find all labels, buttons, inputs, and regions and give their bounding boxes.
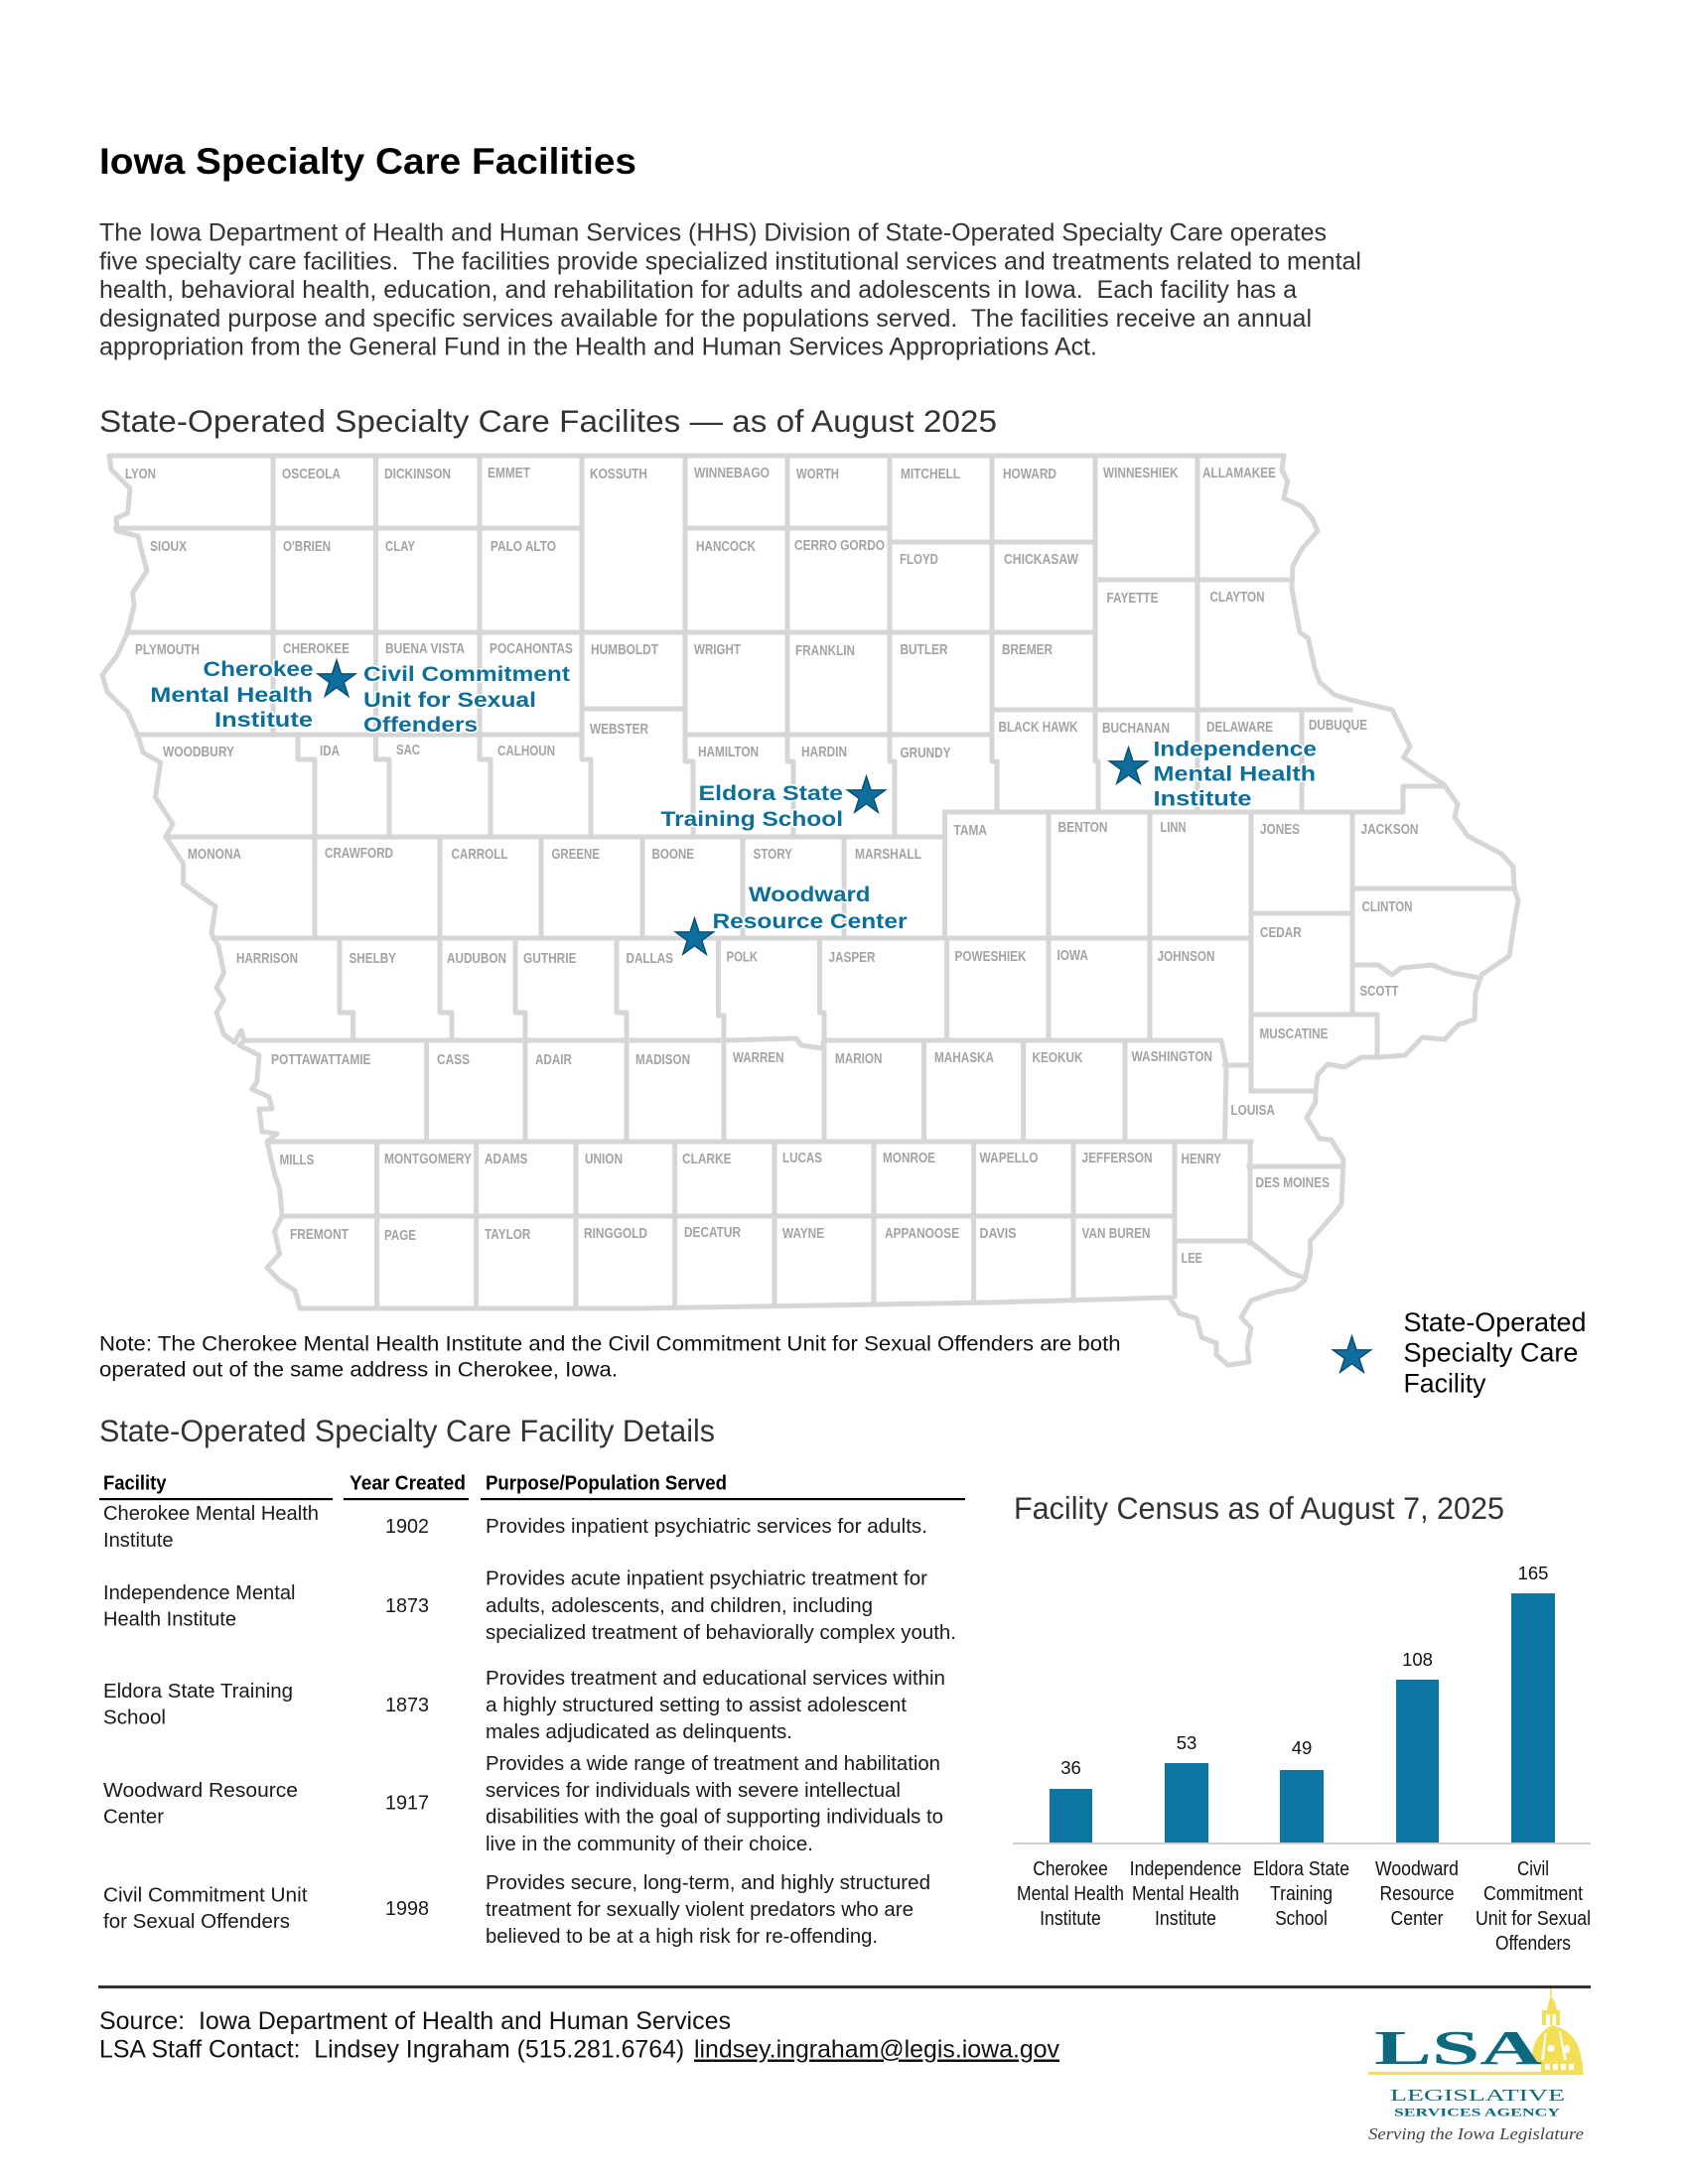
county labels: CLAY	[385, 539, 415, 555]
row: Civil Commitment: treatment for sexually violent predators who are	[486, 1898, 914, 1921]
facility label: Civil Commitment Unit for Sexual Offenders: Unit for Sexual	[363, 688, 536, 712]
note text: Note: The Cherokee Mental Health Institute and the Civil Commitment Unit for Sexual Offenders are both	[99, 1333, 1121, 1356]
county labels: DALLAS	[626, 951, 673, 967]
county labels: SCOTT	[1360, 984, 1399, 1000]
category labels	[1017, 1857, 1591, 1955]
county labels: BOONE	[651, 847, 694, 863]
county labels: CASS	[437, 1052, 470, 1068]
category labels: Eldora State	[1253, 1857, 1349, 1880]
facility label: Civil Commitment Unit for Sexual Offenders: Civil Commitment	[363, 662, 570, 686]
county labels: ADAMS	[485, 1152, 528, 1167]
facility label: Civil Commitment Unit for Sexual Offenders	[363, 662, 570, 737]
county labels: WARREN	[733, 1050, 784, 1066]
county labels: CRAWFORD	[325, 846, 393, 862]
county labels: ADAIR	[535, 1052, 572, 1068]
row: Civil Commitment: believed to be at a high risk for re-offending.	[486, 1925, 878, 1948]
county labels: GREENE	[552, 847, 600, 863]
table header: Year Created	[350, 1472, 466, 1495]
category labels: Civil	[1517, 1857, 1549, 1880]
row: Woodward	[103, 1752, 943, 1855]
county labels: JONES	[1260, 822, 1300, 838]
county labels: DELAWARE	[1206, 720, 1273, 736]
facility marker: Cherokee Mental Health Institute	[150, 657, 355, 732]
county labels: JOHNSON	[1158, 949, 1215, 965]
value labels: 49	[1292, 1737, 1312, 1758]
row: Eldora: 1873	[385, 1694, 429, 1716]
map legend: Facility	[1404, 1369, 1486, 1399]
category labels: Offenders	[1495, 1932, 1571, 1955]
facility marker: Independence Mental Health Institute: Institute	[1154, 786, 1252, 810]
county labels: AUDUBON	[447, 951, 506, 967]
county labels: GRUNDY	[900, 746, 951, 761]
value labels: 165	[1518, 1563, 1548, 1583]
LSA logo: SERVICES AGENCY	[1394, 2108, 1561, 2119]
facility marker: Eldora State Training School	[661, 776, 886, 831]
row: Woodward: services for individuals with severe intellectual	[486, 1779, 901, 1802]
county labels: HAMILTON	[698, 745, 759, 760]
table header: Purpose/Population Served	[486, 1472, 727, 1495]
county labels: BUCHANAN	[1102, 721, 1170, 737]
category labels: Mental Health	[1132, 1882, 1239, 1905]
county labels: LEE	[1182, 1251, 1202, 1267]
row: Cherokee: 1902	[385, 1515, 429, 1538]
county labels: WEBSTER	[590, 722, 648, 738]
LSA logo: Serving the Iowa Legislature	[1368, 2124, 1585, 2143]
row: Civil Commitment: 1998	[385, 1897, 429, 1920]
county labels: BUTLER	[900, 642, 948, 658]
county labels: WASHINGTON	[1132, 1049, 1212, 1065]
category labels: Commitment	[1483, 1882, 1583, 1905]
row: Woodward: Provides a wide range of treatment and habilitation	[486, 1752, 940, 1775]
county labels: TAYLOR	[485, 1227, 531, 1243]
county labels: JEFFERSON	[1082, 1151, 1152, 1166]
county labels: DECATUR	[684, 1225, 741, 1241]
category labels: Mental Health	[1017, 1882, 1124, 1905]
category labels: Training	[1270, 1882, 1333, 1905]
county labels: MADISON	[635, 1052, 690, 1068]
facility marker: Cherokee Mental Health Institute: Institute	[214, 708, 313, 732]
county labels: GUTHRIE	[523, 951, 577, 967]
county labels: FLOYD	[900, 552, 938, 568]
row: Civil Commitment: Civil Commitment Unit	[103, 1884, 308, 1907]
county labels: BLACK HAWK	[999, 720, 1078, 736]
row: Civil Commitment	[103, 1871, 930, 1948]
facility marker: Independence Mental Health Institute: Independence	[1154, 737, 1317, 760]
facility marker: Cherokee Mental Health Institute: Mental Health	[150, 683, 313, 707]
county labels: DAVIS	[979, 1226, 1017, 1242]
category labels: Independence	[1130, 1857, 1241, 1880]
county labels: FAYETTE	[1106, 591, 1159, 607]
county labels: LOUISA	[1231, 1103, 1275, 1119]
county labels: MONTGOMERY	[384, 1152, 472, 1167]
row: Cherokee: Provides inpatient psychiatric services for adults.	[486, 1515, 927, 1538]
county labels: HANCOCK	[696, 539, 756, 555]
row: Eldora: males adjudicated as delinquents.	[486, 1720, 792, 1743]
table heading: State-Operated Specialty Care Facility Details	[99, 1413, 715, 1448]
value labels: 36	[1060, 1757, 1081, 1778]
category labels: Center	[1390, 1907, 1444, 1930]
county labels: CHICKASAW	[1004, 552, 1078, 568]
county labels: APPANOOSE	[885, 1226, 959, 1242]
row: Independence: 1873	[385, 1594, 429, 1617]
county labels: PAGE	[384, 1228, 416, 1244]
category labels: Woodward	[1375, 1857, 1459, 1880]
county labels: DICKINSON	[384, 467, 451, 482]
facility marker: Independence Mental Health Institute	[1109, 737, 1317, 810]
row: Cherokee: Institute	[103, 1529, 174, 1552]
intro paragraph: five specialty care facilities. The facilities provide specialized institutional services and treatments related to mental	[99, 248, 1361, 276]
county labels: MARION	[835, 1051, 882, 1067]
source and contact: lindsey.ingraham@legis.iowa.gov	[694, 2035, 1059, 2063]
source and contact: LSA Staff Contact: Lindsey Ingraham (515.281.6764)	[99, 2035, 691, 2063]
row: Independence	[103, 1568, 956, 1644]
county labels: RINGGOLD	[584, 1226, 647, 1242]
county labels: WORTH	[796, 467, 839, 482]
county labels: ALLAMAKEE	[1202, 466, 1276, 481]
county labels: PALO ALTO	[491, 539, 556, 555]
LSA logo: LSA	[1374, 2020, 1543, 2075]
chart title: Facility Census as of August 7, 2025	[1014, 1490, 1504, 1526]
county labels: WRIGHT	[694, 642, 741, 658]
county labels: UNION	[585, 1152, 623, 1167]
county labels: PLYMOUTH	[135, 642, 200, 658]
row: Woodward: live in the community of their choice.	[486, 1833, 813, 1855]
county labels	[125, 466, 1418, 1267]
row: Independence: Provides acute inpatient psychiatric treatment for	[486, 1568, 927, 1590]
icon: capitol dome	[1531, 1988, 1583, 2072]
county labels: KEOKUK	[1033, 1050, 1083, 1066]
county labels: SIOUX	[150, 539, 187, 555]
census chart	[1013, 1490, 1591, 1955]
row: Independence: Health Institute	[103, 1608, 236, 1631]
county labels: LUCAS	[782, 1151, 822, 1166]
county labels: CALHOUN	[497, 744, 555, 759]
facility marker: Eldora State Training School: Training School	[661, 807, 843, 831]
facility marker: Woodward Resource Center: Woodward	[749, 883, 870, 906]
county labels: POCAHONTAS	[490, 641, 573, 657]
row: Woodward: 1917	[385, 1792, 429, 1815]
facility marker: Woodward Resource Center: Resource Center	[713, 909, 908, 933]
county labels: CERRO GORDO	[794, 538, 885, 554]
row: Independence: adults, adolescents, and children, including	[486, 1594, 873, 1617]
county labels: MUSCATINE	[1259, 1026, 1329, 1042]
county labels: CARROLL	[451, 847, 508, 863]
value labels: 53	[1177, 1732, 1196, 1753]
facility details table	[99, 1472, 965, 1948]
county labels: SHELBY	[350, 951, 396, 967]
facility marker: Independence Mental Health Institute: Mental Health	[1154, 762, 1316, 786]
county labels: JASPER	[828, 950, 876, 966]
category labels: School	[1275, 1907, 1328, 1930]
county labels: FRANKLIN	[795, 643, 855, 659]
county labels: WAYNE	[782, 1226, 824, 1242]
county labels: POLK	[727, 949, 759, 965]
map legend	[1333, 1307, 1587, 1399]
row: Woodward: Center	[103, 1806, 164, 1829]
county labels: STORY	[753, 847, 792, 863]
note text	[99, 1333, 1121, 1382]
county labels: MONROE	[883, 1151, 935, 1166]
row: Cherokee	[103, 1502, 927, 1552]
category labels: Resource	[1380, 1882, 1454, 1905]
county labels: WINNEBAGO	[694, 466, 770, 481]
county labels: HARRISON	[236, 951, 298, 967]
value labels: 108	[1402, 1649, 1433, 1670]
county labels: SAC	[396, 743, 420, 758]
county labels: TAMA	[953, 823, 987, 839]
county labels: POTTAWATTAMIE	[271, 1052, 371, 1068]
value labels	[1060, 1563, 1548, 1778]
county labels: MITCHELL	[901, 467, 960, 482]
county labels: LINN	[1160, 820, 1186, 836]
county labels: VAN BUREN	[1082, 1226, 1150, 1242]
county labels: CLAYTON	[1209, 590, 1265, 606]
county labels: HARDIN	[801, 745, 847, 760]
county labels: BENTON	[1058, 820, 1108, 836]
county labels: EMMET	[488, 466, 530, 481]
county labels: BREMER	[1002, 642, 1053, 658]
table header	[99, 1472, 965, 1500]
facility marker: Cherokee Mental Health Institute: Cherokee	[203, 657, 314, 681]
county labels: HOWARD	[1003, 467, 1056, 482]
county labels: CLARKE	[682, 1152, 732, 1167]
county labels: HUMBOLDT	[591, 642, 658, 658]
row: Independence: Independence Mental	[103, 1581, 296, 1604]
row: Eldora	[103, 1667, 945, 1743]
row: Woodward: Woodward Resource	[103, 1779, 298, 1802]
county labels: MONONA	[188, 847, 241, 863]
county labels: O'BRIEN	[283, 539, 331, 555]
county labels: MAHASKA	[934, 1050, 994, 1066]
county labels: WINNESHIEK	[1103, 466, 1179, 481]
county labels: MARSHALL	[855, 847, 921, 863]
county labels: POWESHIEK	[955, 949, 1027, 965]
county labels: CHEROKEE	[283, 641, 350, 657]
county labels: CEDAR	[1260, 925, 1302, 941]
county labels: DUBUQUE	[1309, 718, 1367, 734]
county labels: MILLS	[280, 1153, 315, 1168]
intro paragraph: designated purpose and specific services available for the populations served. The facilities receive an annual	[99, 305, 1312, 333]
LSA logo: LEGISLATIVE	[1390, 2086, 1565, 2105]
table header: Facility	[103, 1472, 167, 1495]
LSA logo	[1368, 1988, 1585, 2143]
row: Independence: specialized treatment of behaviorally complex youth.	[486, 1621, 956, 1644]
source and contact	[99, 2007, 1059, 2063]
map heading: State-Operated Specialty Care Facilites — as of August 2025	[99, 403, 997, 439]
intro paragraph: health, behavioral health, education, and rehabilitation for adults and adolescents in Iowa. Each facility has a	[99, 276, 1297, 304]
county labels: OSCEOLA	[282, 467, 341, 482]
facility marker: Woodward Resource Center	[675, 883, 908, 954]
row: Civil Commitment: Provides secure, long-term, and highly structured	[486, 1871, 930, 1894]
category labels: Institute	[1155, 1907, 1216, 1930]
county labels: HENRY	[1182, 1152, 1221, 1167]
intro paragraph: The Iowa Department of Health and Human Services (HHS) Division of State-Operated Specialty Care operates	[99, 219, 1327, 247]
county labels: LYON	[125, 467, 156, 482]
county labels: CLINTON	[1362, 899, 1412, 915]
category labels: Unit for Sexual	[1476, 1907, 1591, 1930]
category labels: Institute	[1040, 1907, 1101, 1930]
note text: operated out of the same address in Cherokee, Iowa.	[99, 1359, 618, 1382]
county boundary lines	[116, 456, 1514, 1307]
row: Cherokee: Cherokee Mental Health	[103, 1502, 319, 1525]
county labels: DES MOINES	[1255, 1175, 1330, 1191]
row: Eldora: a highly structured setting to assist adolescent	[486, 1694, 907, 1716]
category labels: Cherokee	[1033, 1857, 1108, 1880]
row: Woodward: disabilities with the goal of supporting individuals to	[486, 1806, 943, 1829]
row: Civil Commitment: for Sexual Offenders	[103, 1910, 290, 1933]
county labels: IDA	[320, 744, 340, 759]
intro paragraph: appropriation from the General Fund in the Health and Human Services Appropriations Act.	[99, 334, 1097, 361]
county labels: KOSSUTH	[590, 467, 647, 482]
row: Eldora: School	[103, 1706, 166, 1729]
county labels: FREMONT	[290, 1227, 349, 1243]
map legend: State-Operated	[1404, 1307, 1587, 1337]
facility label: Civil Commitment Unit for Sexual Offenders: Offenders	[363, 713, 478, 737]
county labels: WOODBURY	[163, 745, 234, 760]
bars	[1050, 1593, 1555, 1843]
map of Iowa counties	[102, 456, 1518, 1365]
county labels: BUENA VISTA	[385, 641, 465, 657]
row: Eldora: Eldora State Training	[103, 1680, 293, 1703]
county labels: JACKSON	[1360, 822, 1418, 838]
title: Iowa Specialty Care Facilities	[99, 141, 636, 182]
state outline	[102, 456, 1518, 1365]
county labels: IOWA	[1056, 948, 1088, 964]
map legend: Specialty Care	[1404, 1338, 1579, 1368]
row: Eldora: Provides treatment and educational services within	[486, 1667, 945, 1690]
intro paragraph	[99, 219, 1361, 361]
facility marker: Eldora State Training School: Eldora State	[699, 781, 843, 805]
source and contact: Source: Iowa Department of Health and Human Services	[99, 2007, 731, 2035]
county labels: WAPELLO	[979, 1151, 1039, 1166]
